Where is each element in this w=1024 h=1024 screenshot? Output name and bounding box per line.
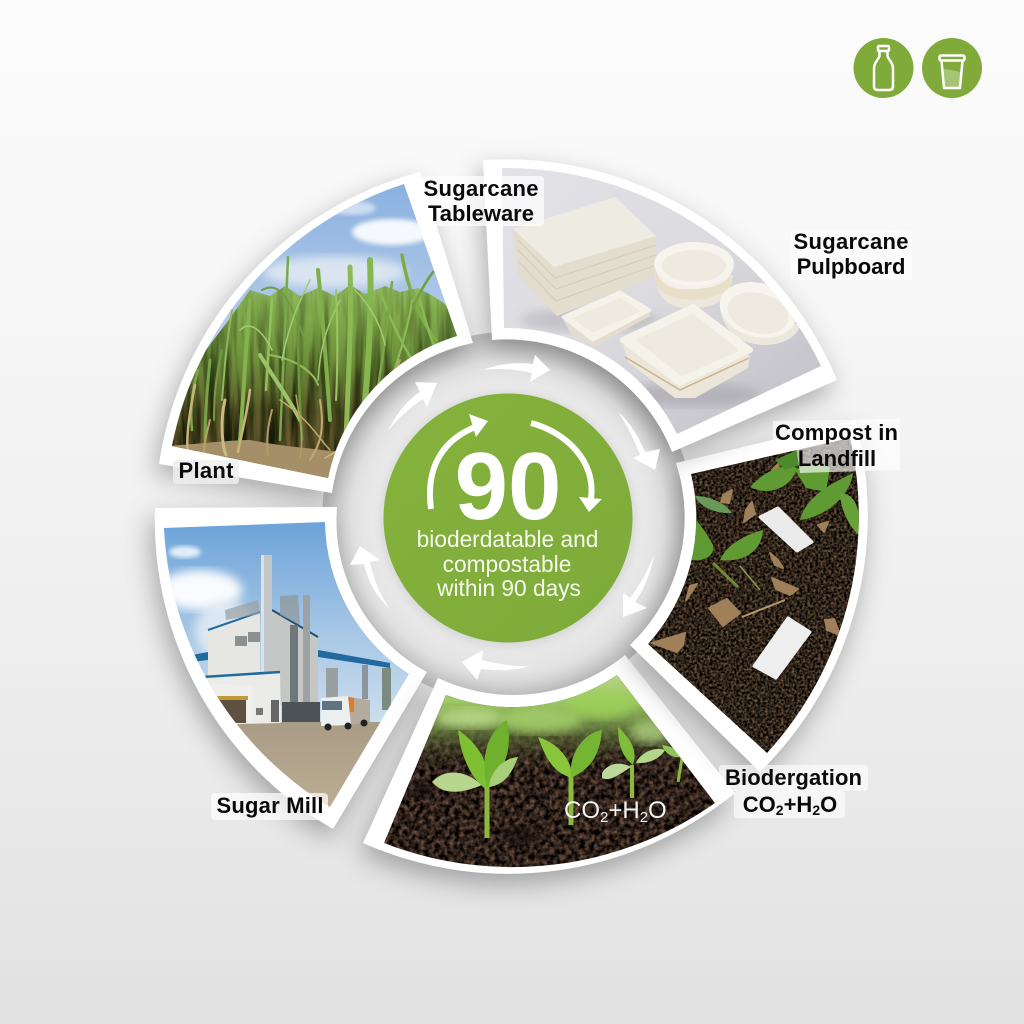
circular arrows (430, 414, 602, 512)
ring arrows (350, 355, 660, 680)
inner ring disc (322, 332, 694, 704)
icon: cup (922, 38, 982, 98)
label: compost in landfill: Compost in (775, 420, 898, 445)
label: compost in landfill (773, 419, 900, 473)
label: sugarcane tableware (422, 176, 544, 226)
label: biodegradation: +H (784, 792, 812, 817)
big number: 90 (455, 433, 561, 540)
label: biodegradation: 2 (812, 802, 820, 818)
truck (321, 696, 370, 730)
icon: bottle (854, 38, 914, 98)
center badge (384, 394, 632, 642)
arrow 1 (388, 382, 437, 431)
caption (417, 526, 598, 601)
arrow 6 (350, 546, 390, 609)
label: biodegradation: CO (743, 792, 776, 817)
label: biodegradation (719, 765, 868, 818)
dead leaves (652, 464, 840, 652)
photo: seedlings in soil (384, 675, 715, 868)
plant one (432, 720, 518, 838)
panel: sugar mill (155, 507, 427, 829)
label: compost in landfill: Landfill (798, 446, 876, 471)
label: sugarcane pulpboard (790, 229, 912, 280)
bowls stacked (654, 242, 734, 308)
label on photo: CO2+H2O: CO (564, 797, 600, 824)
photo: pulpboard and tableware (502, 168, 821, 434)
label: biodegradation: O (820, 792, 837, 817)
label: sugarcane tableware: Sugarcane (424, 176, 538, 201)
plant two (538, 730, 602, 825)
label on photo: CO2+H2O: O (648, 797, 667, 824)
label: biodegradation: Biodergation (725, 765, 862, 790)
right bowl (720, 282, 799, 345)
large tray stack (623, 307, 750, 398)
arrow 3 (618, 412, 660, 470)
arrow 2 (483, 355, 550, 382)
biomaterial pieces (760, 508, 812, 551)
photo: compost soil with leaves (648, 438, 859, 753)
arrow 4 (623, 555, 654, 617)
cycle diagram (155, 159, 912, 880)
leaves (691, 450, 861, 560)
label on photo: CO2+H2O: +H (608, 797, 640, 824)
label: sugarcane pulpboard: Sugarcane (794, 229, 908, 254)
panel: seedlings (363, 655, 735, 880)
panel: plant (159, 170, 473, 493)
pulpboard stack (513, 197, 656, 316)
label on photo: CO2+H2O: 2 (640, 809, 648, 826)
plant three (602, 727, 682, 798)
panel: tableware products (483, 159, 837, 452)
caption: bioderdatable and (417, 526, 598, 552)
caption: compostable (443, 551, 571, 577)
small tray (563, 292, 650, 347)
label on photo: CO2+H2O: 2 (600, 809, 608, 826)
label: biodegradation: 2 (776, 802, 784, 818)
label: sugarcane tableware: Tableware (428, 201, 534, 226)
label: sugar mill: Sugar Mill (216, 793, 324, 818)
caption: within 90 days (436, 575, 581, 601)
label: sugarcane pulpboard: Pulpboard (797, 254, 905, 279)
photo: sugarcane field (172, 184, 457, 478)
label: plant: Plant (178, 458, 234, 483)
panel: compost (630, 420, 870, 772)
photo: sugar mill (158, 520, 420, 812)
arrow 5 (462, 650, 530, 680)
